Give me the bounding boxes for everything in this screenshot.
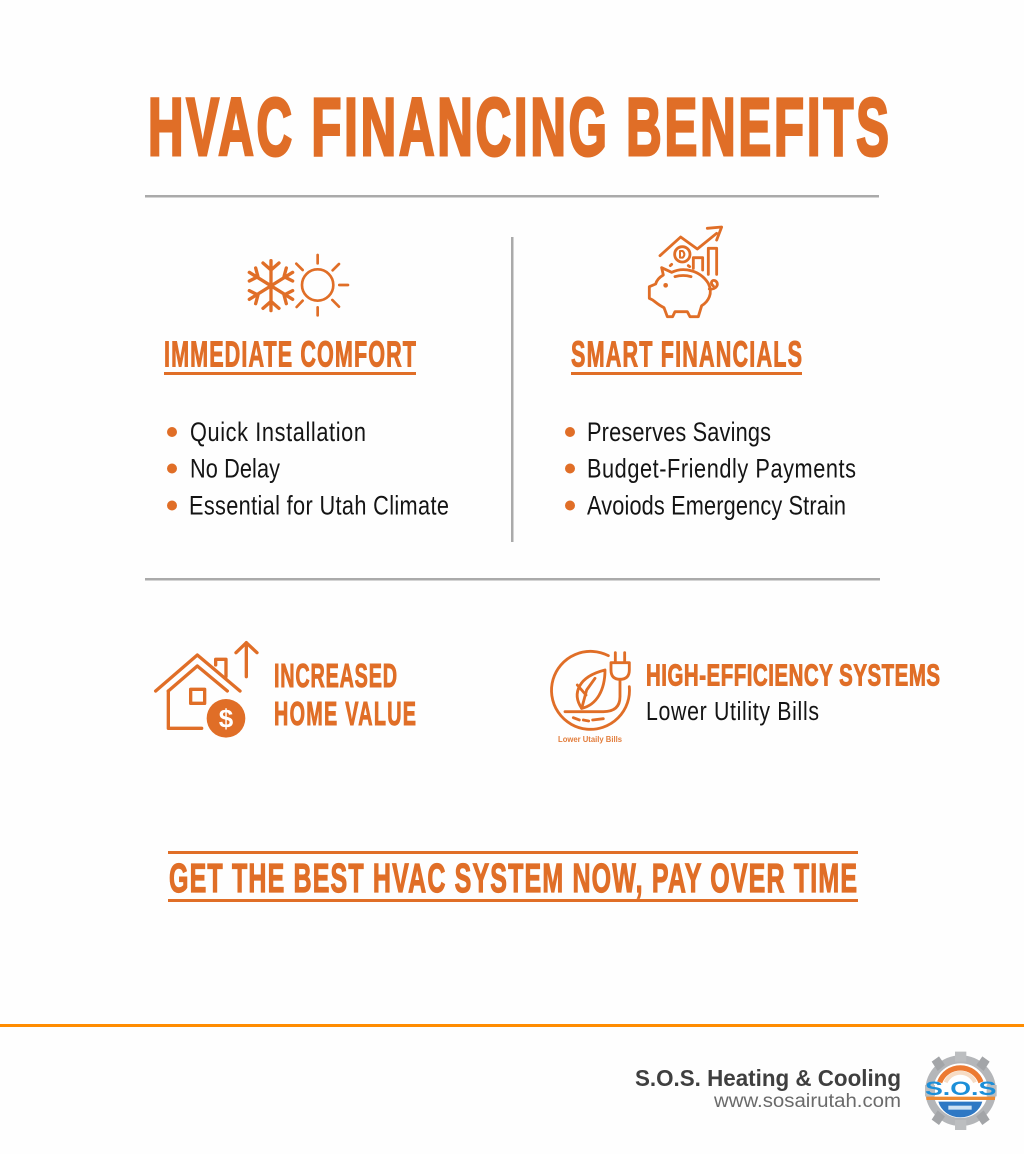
icon: house with dollar and arrow: $: [219, 703, 234, 733]
heading: immediate comfort: IMMEDIATE COMFORT: [164, 335, 416, 375]
icon: leaf and plug circle: [552, 651, 629, 729]
subheading: lower utility bills: Lower Utility Bills: [646, 697, 819, 727]
bullet list: smart financials: Budget-Friendly Payments: [587, 455, 856, 484]
title: HVAC FINANCING BENEFITS: [148, 82, 889, 173]
bullet list: immediate comfort: Essential for Utah Climate: [189, 492, 449, 521]
icon: house with dollar and arrow: [156, 643, 257, 738]
logo: S.O.S. gear badge: [925, 1052, 997, 1130]
panel: increased home value: [156, 643, 416, 738]
footer: company name and website: [635, 1065, 901, 1112]
call to action: GET THE BEST HVAC SYSTEM NOW, PAY OVER TIME: [169, 856, 857, 902]
heading: high-efficiency systems: HIGH-EFFICIENCY SYSTEMS: [646, 657, 940, 693]
logo: S.O.S. gear badge: S.O.S: [925, 1079, 996, 1100]
bullet list: smart financials: [565, 418, 856, 521]
caption: lower utaily bills: Lower Utaily Bills: [558, 734, 622, 744]
heading: smart financials: SMART FINANCIALS: [571, 335, 802, 375]
bullet list: smart financials: Avoiods Emergency Strain: [587, 492, 846, 521]
heading: increased home value: INCREASED: [274, 657, 397, 694]
footer: company name and website: www.sosairutah.com: [713, 1091, 901, 1112]
bullet list: immediate comfort: Quick Installation: [190, 418, 366, 448]
panel: high-efficiency systems: [552, 651, 940, 744]
bullet list: immediate comfort: [167, 418, 449, 521]
bullet list: immediate comfort: No Delay: [190, 455, 281, 484]
heading: increased home value: HOME VALUE: [274, 695, 416, 732]
footer: company name and website: S.O.S. Heating & Cooling: [635, 1065, 901, 1091]
icon: piggy bank with growth chart: [649, 227, 722, 317]
heading: increased home value: [274, 657, 416, 732]
bullet list: smart financials: Preserves Savings: [587, 418, 771, 448]
panel: smart financials: [565, 227, 856, 521]
icon: snowflake and sun: [249, 255, 348, 315]
panel: immediate comfort: [164, 255, 449, 521]
